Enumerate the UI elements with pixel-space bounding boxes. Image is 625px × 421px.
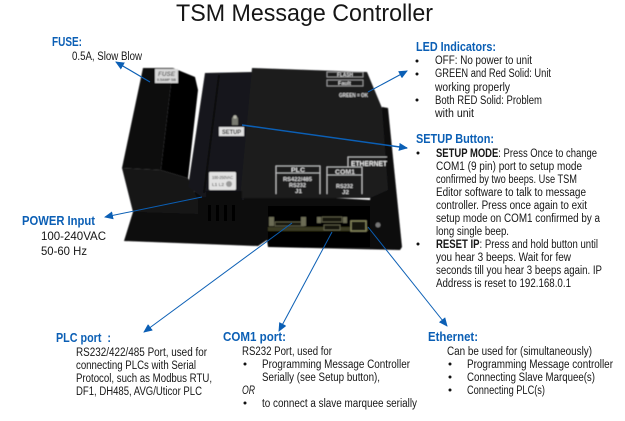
plc silkscreen: J1 — [295, 189, 302, 195]
fuse label: FUSE — [158, 72, 176, 78]
arrow: led indicators — [368, 71, 407, 92]
com1 description: Serially (see Setup button), — [262, 372, 380, 384]
power label: 100-250VAC — [212, 175, 234, 180]
main housing top — [240, 68, 388, 198]
ethernet heading: Ethernet: — [428, 329, 478, 344]
main housing side strip — [188, 72, 252, 200]
fuse enclosure — [122, 68, 198, 214]
ethernet description: Connecting PLC(s) — [467, 385, 545, 397]
setup list: Editor software to talk to message — [436, 187, 586, 199]
com1 silkscreen: J2 — [342, 190, 349, 196]
plc description: Protocol, such as Modbus RTU, — [76, 373, 212, 385]
panel: ethernet — [428, 329, 613, 397]
device photo: TSM controller — [122, 68, 402, 250]
plc silkscreen: RS422/485 — [283, 177, 312, 183]
ethernet bullets — [448, 362, 452, 392]
setup label: SETUP — [222, 130, 241, 136]
plc description: RS232/422/485 Port, used for — [76, 347, 207, 359]
com1 description — [242, 346, 417, 410]
setup list: confirmed by two beeps. Use TSM — [436, 174, 577, 186]
led list: OFF: No power to unit — [435, 55, 533, 67]
com1 silkscreen — [327, 167, 362, 196]
power label: L1 L2 — [212, 182, 225, 187]
com1 description: Programming Message Controller — [262, 359, 410, 371]
ethernet description — [447, 346, 613, 397]
fuse heading: FUSE: — [52, 34, 82, 49]
setup list: COM1 (9 pin) port to setup mode — [436, 161, 582, 173]
ethernet description: Connecting Slave Marquee(s) — [467, 372, 595, 384]
connector recess — [268, 206, 370, 247]
base plate — [124, 107, 402, 250]
arrow: fuse — [116, 62, 150, 82]
led list: Both RED Solid: Problem — [435, 95, 542, 107]
com1 description: to connect a slave marquee serially — [262, 398, 417, 410]
led list — [434, 55, 552, 120]
led heading: LED Indicators: — [416, 39, 496, 54]
mounting screw — [376, 222, 380, 228]
power voltage: 100-240VAC — [41, 229, 106, 243]
led list: with unit — [434, 108, 475, 120]
circuit board strip — [268, 227, 368, 231]
plc description — [76, 347, 212, 398]
arrow: power input — [105, 197, 202, 217]
setup list: controller. Press once again to exit — [436, 200, 588, 212]
panel: plc port — [56, 330, 212, 398]
power socket — [206, 191, 242, 201]
heat sink fins — [208, 205, 235, 221]
plc description: DF1, DH485, AVG/Uticor PLC — [76, 386, 202, 398]
com1 silkscreen: COM1 — [335, 170, 356, 176]
fuse label — [155, 69, 178, 83]
plc silkscreen: RS232 — [289, 183, 306, 189]
arrow: com1 port — [279, 232, 332, 331]
plc silkscreen: PLC — [291, 168, 306, 174]
setup list: SETUP MODE: Press Once to change — [436, 148, 597, 160]
setup label — [219, 127, 244, 136]
setup bullets — [416, 152, 420, 246]
arrow: setup button — [242, 125, 407, 148]
ethernet silkscreen: ETHERNET — [351, 159, 387, 168]
com1 description: RS232 Port, used for — [242, 346, 332, 358]
setup list: setup mode on COM1 confirmed by a — [436, 213, 601, 225]
plc description: connecting PLCs with Serial — [76, 360, 196, 372]
setup list: RESET IP: Press and hold button until — [436, 239, 598, 251]
flash indicator label — [327, 72, 363, 78]
setup heading: SETUP Button: — [416, 131, 494, 146]
led list: working properly — [434, 82, 510, 94]
green ok label: GREEN = OK — [339, 93, 368, 99]
panel: setup button — [416, 131, 602, 290]
setup list — [436, 148, 602, 290]
panel: com1 port — [223, 329, 417, 410]
title: TSM Message Controller — [176, 0, 433, 27]
fuse label: 0.5AMP SB — [157, 77, 176, 82]
com1 bullets — [244, 362, 246, 404]
ethernet jack — [351, 221, 366, 231]
panel: fuse — [52, 34, 143, 63]
setup list: Address is reset to 192.168.0.1 — [436, 278, 571, 290]
panel: power input — [22, 213, 106, 258]
flash indicator label: FLASH — [337, 72, 353, 78]
setup button — [232, 115, 238, 125]
fuse text: 0.5A, Slow Blow — [72, 51, 143, 63]
plc silkscreen — [276, 166, 320, 195]
led bullets — [416, 60, 418, 102]
arrow: plc port — [144, 223, 292, 332]
plc serial connector — [269, 217, 306, 226]
ethernet silkscreen — [348, 157, 387, 168]
power frequency: 50-60 Hz — [41, 244, 87, 258]
panel: led indicators — [416, 39, 552, 120]
power heading: POWER Input — [22, 213, 96, 228]
fault indicator label — [327, 80, 363, 87]
plc heading: PLC port : — [56, 330, 111, 345]
com1 serial connector — [317, 217, 347, 230]
arrow: ethernet — [368, 227, 447, 326]
setup list: you hear 3 beeps. Wait for few — [436, 252, 572, 264]
fault indicator label: Fault — [338, 81, 351, 87]
power label — [209, 172, 236, 190]
led list: GREEN and Red Solid: Unit — [435, 68, 552, 80]
setup list: long single beep. — [436, 226, 509, 238]
com1 description: OR — [242, 385, 255, 397]
ethernet description: Can be used for (simultaneously) — [447, 346, 592, 358]
com1 heading: COM1 port: — [223, 329, 286, 344]
com1 silkscreen: RS232 — [336, 184, 353, 190]
